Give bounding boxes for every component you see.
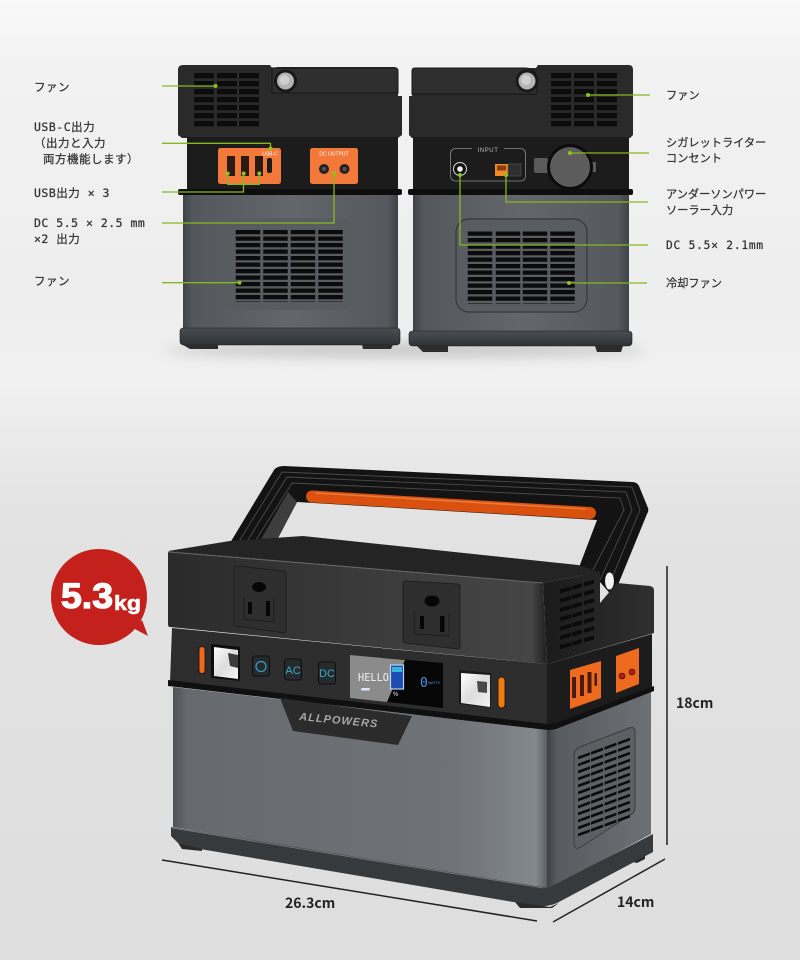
input ports group: INPUT — [478, 148, 498, 154]
LCD display: 0 — [420, 676, 428, 691]
LCD display: % — [393, 692, 399, 698]
base seam — [172, 828, 543, 888]
lamp right — [459, 670, 491, 708]
middle band side — [547, 634, 652, 727]
feet — [183, 345, 393, 349]
side fan — [574, 728, 635, 848]
callout lines: left — [162, 84, 336, 285]
black waist band — [408, 189, 633, 195]
lower body side — [547, 692, 651, 890]
waist band — [168, 680, 654, 730]
feet — [178, 843, 645, 908]
DC output panel: DC OUTPUT — [319, 152, 349, 158]
middle black band — [187, 137, 398, 190]
panel: right side view of unit — [408, 65, 633, 352]
middle band front — [170, 628, 547, 727]
orange grip — [312, 496, 590, 513]
handle end with knob — [412, 68, 538, 94]
label: USB output x3: USB出力 × 3 — [34, 186, 110, 200]
fan panel — [224, 218, 353, 310]
input ports group — [450, 148, 526, 181]
label: cigarette socket: シガレットライター — [666, 136, 766, 150]
LCD display: HELLO — [358, 671, 389, 684]
black waist band — [178, 189, 402, 195]
pivot highlight — [605, 572, 614, 590]
base — [171, 827, 653, 906]
LED left — [199, 646, 205, 674]
top surface — [168, 536, 600, 583]
feet — [417, 346, 623, 352]
label: USB-C output: USB-C出力 — [34, 120, 95, 134]
dimension: width: 26.3cm — [285, 893, 335, 913]
cooling fan panel — [456, 219, 587, 312]
lamp left — [211, 644, 240, 681]
cigarette lighter socket — [534, 144, 596, 190]
LCD display — [350, 655, 443, 708]
top block side — [543, 572, 654, 664]
dimension: depth: 14cm — [617, 892, 654, 912]
top block edge — [169, 552, 543, 583]
LCD display: WATTS — [428, 681, 441, 685]
callout lines: right — [458, 93, 650, 285]
label: fan top left: ファン — [34, 80, 70, 94]
panel: left side view of unit — [178, 65, 402, 349]
base cap — [180, 328, 400, 345]
handle inner leg — [260, 492, 297, 541]
lower body front — [173, 687, 547, 890]
DC output panel — [310, 148, 358, 184]
label: DC 5.5 x 2.1mm: DC 5.5× 2.1mm — [666, 239, 764, 252]
label: USB-C output: （出力と入力 — [34, 136, 106, 150]
top block — [178, 65, 402, 138]
handle ribs — [238, 472, 640, 590]
buttons: DC — [319, 668, 335, 680]
USB output panel — [218, 148, 281, 184]
label: fan lower left: ファン — [34, 274, 70, 288]
USB output panel: USB-C — [262, 152, 278, 158]
label: Anderson power solar input: アンダーソンパワー — [666, 187, 766, 201]
panel: large product view — [168, 466, 654, 908]
side vents — [566, 581, 589, 651]
carrying handle — [230, 466, 648, 597]
middle black band — [413, 137, 629, 190]
label: cooling fan: 冷却ファン — [666, 277, 722, 290]
side USB panel — [570, 661, 601, 709]
lower grey body — [183, 195, 398, 331]
dimension: width — [162, 860, 537, 921]
top fan vents — [204, 73, 249, 129]
top block — [409, 65, 633, 138]
weight badge — [51, 549, 148, 645]
weight badge: 5.3 — [61, 577, 113, 616]
top block front — [168, 551, 547, 664]
logo plate — [280, 698, 412, 745]
LED right — [498, 677, 505, 708]
label: DC 5.5 x 2.5 mm: ×2 出力 — [34, 232, 80, 246]
side DC panel — [616, 648, 639, 693]
label: fan top right: ファン — [666, 89, 700, 102]
logo plate: ALLPOWERS — [298, 711, 379, 731]
dimension: depth — [553, 859, 665, 922]
lower grey body — [413, 195, 629, 332]
label: Anderson power solar input: ソーラー入力 — [666, 204, 733, 217]
label: cigarette socket: コンセント — [666, 152, 722, 165]
outlet left — [234, 566, 286, 633]
buttons — [252, 656, 336, 684]
handle end with knob — [272, 68, 398, 93]
dimension: height: 18cm — [676, 693, 713, 713]
weight badge: kg — [114, 593, 141, 615]
top fan vents — [561, 73, 607, 129]
shadow under upper units — [165, 343, 645, 357]
label: USB-C output: 両方機能します） — [43, 152, 139, 166]
label: DC 5.5 x 2.5 mm: DC 5.5 × 2.5 mm — [34, 216, 145, 230]
base cap — [409, 331, 632, 346]
buttons: AC — [285, 665, 301, 677]
outlet right — [403, 581, 460, 649]
